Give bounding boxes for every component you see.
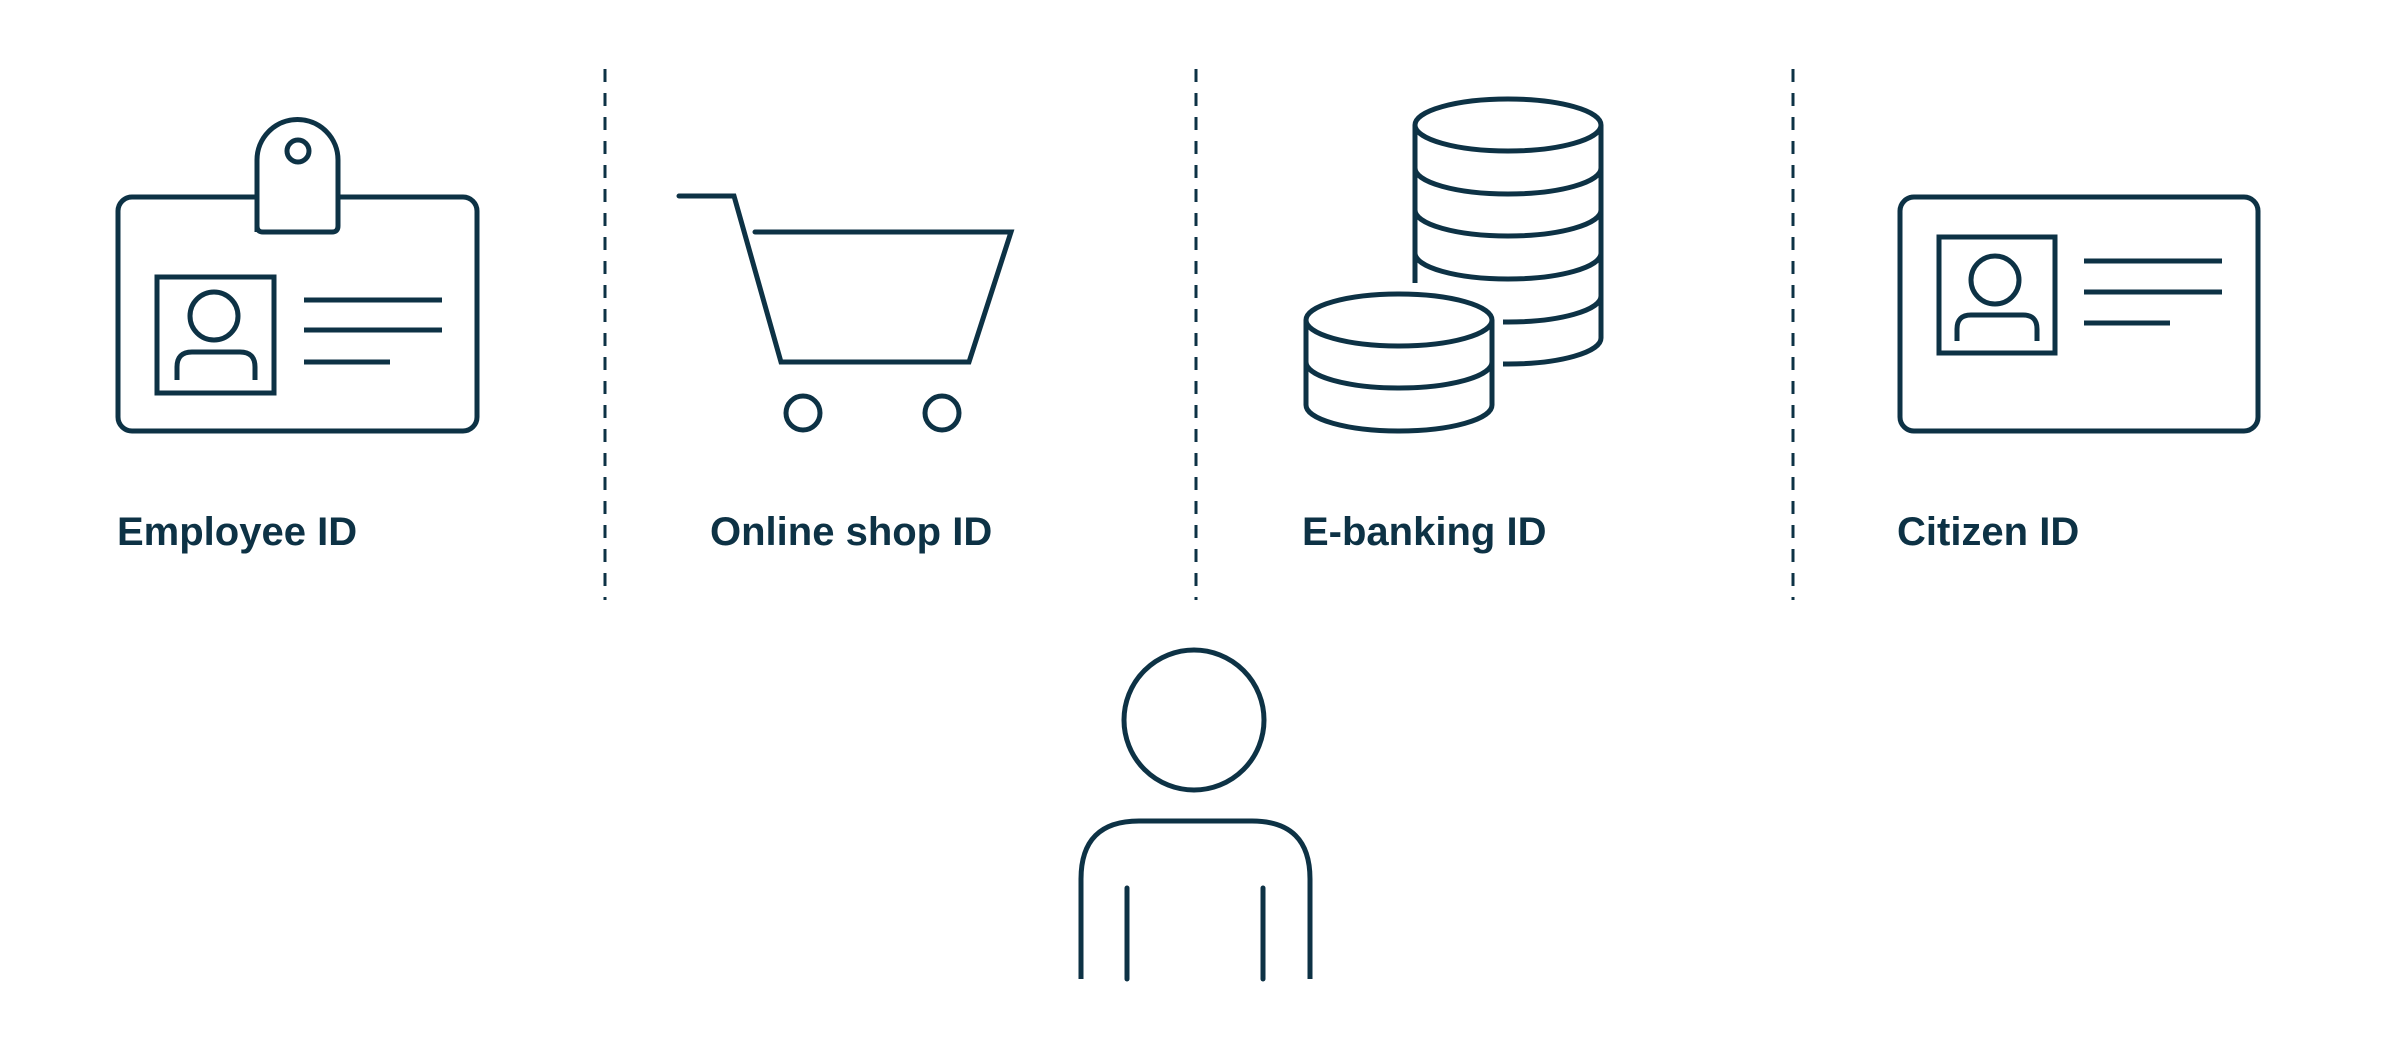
icon: person <box>1081 650 1310 979</box>
label: citizen: Citizen ID <box>1897 510 2079 554</box>
icon: employee badge <box>118 120 477 431</box>
icon: citizen card <box>1900 197 2258 431</box>
label: online shop: Online shop ID <box>710 510 992 554</box>
icon: coin stacks <box>1306 99 1601 431</box>
icon: shopping cart <box>679 196 1011 430</box>
label: employee: Employee ID <box>117 510 357 554</box>
label: e-banking: E-banking ID <box>1302 510 1546 554</box>
